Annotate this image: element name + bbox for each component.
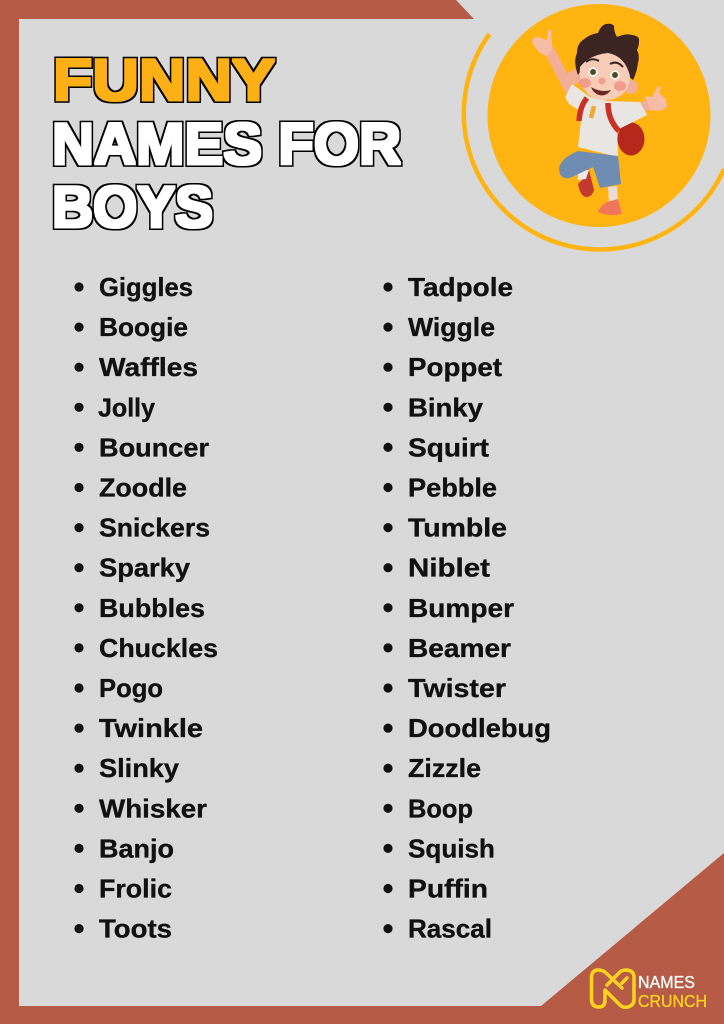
name row: Squirt: [408, 432, 489, 462]
icon: N monogram: [592, 970, 634, 1007]
name row: Squish: [408, 833, 495, 863]
name row: Toots: [99, 914, 172, 944]
name row: Pogo: [99, 673, 163, 703]
pointing hand: [645, 86, 667, 111]
cheeks: [579, 78, 591, 88]
left ear: [567, 70, 581, 84]
name row: Poppet: [408, 352, 502, 382]
name row: Bumper: [408, 593, 514, 623]
icon: cartoon boy with backpack: [532, 24, 667, 215]
name row: Niblet: [408, 553, 490, 583]
name row: Wiggle: [408, 312, 495, 342]
yellow circle behind character: [488, 4, 710, 227]
name row: Frolic: [99, 874, 172, 904]
name row: Chuckles: [99, 633, 218, 663]
name row: Puffin: [408, 874, 488, 904]
logo text: NAMES: NAMES: [638, 972, 695, 992]
extended arm: [634, 103, 652, 111]
name row: [74, 392, 156, 422]
title: [52, 48, 401, 240]
name row: Zoodle: [99, 472, 187, 502]
name row: Tumble: [408, 513, 507, 543]
name row: Bouncer: [99, 432, 209, 462]
name row: Doodlebug: [408, 713, 551, 743]
hair: [575, 24, 639, 80]
name row: Snickers: [99, 513, 210, 543]
name row: Waffles: [99, 352, 198, 382]
name row: Banjo: [99, 833, 174, 863]
sock: [578, 168, 589, 180]
backpack straps: [579, 98, 619, 131]
name row: Twister: [408, 673, 506, 703]
shirt: [565, 84, 647, 157]
title line: BOYS: BOYS: [52, 175, 213, 240]
name row: [383, 553, 490, 583]
face: [580, 53, 630, 100]
names list: left column: [74, 272, 218, 944]
name row: Binky: [408, 392, 484, 422]
name row: Boop: [408, 793, 473, 823]
names list: right column: [383, 272, 551, 944]
name row: Rascal: [408, 914, 492, 944]
name row: Jolly: [98, 392, 156, 422]
name row: Zizzle: [408, 753, 481, 783]
eyebrows: [586, 59, 623, 67]
logo text: CRUNCH: CRUNCH: [638, 991, 707, 1011]
shorts: [559, 151, 621, 188]
mouth: [591, 87, 611, 95]
name row: Slinky: [99, 753, 180, 783]
standing foot shoe: [598, 199, 622, 215]
raised hand: [532, 30, 552, 56]
standing leg sock: [608, 186, 618, 203]
name row: Bubbles: [99, 593, 205, 623]
name row: Pebble: [408, 472, 497, 502]
yellow ring arc: [464, 34, 724, 250]
nose: [598, 78, 606, 84]
name row: Giggles: [99, 272, 193, 302]
eyes: [588, 68, 598, 76]
name row: Sparky: [99, 553, 191, 583]
raised arm: [549, 50, 569, 88]
name row: Boogie: [99, 312, 188, 342]
raised foot shoe: [578, 166, 594, 197]
right ear: [624, 80, 638, 94]
name row: Whisker: [99, 793, 207, 823]
name row: Beamer: [408, 633, 511, 663]
title line: FUNNY: FUNNY: [53, 48, 275, 113]
backpack: [618, 122, 644, 156]
shirt placket: [591, 106, 594, 118]
logo: Names Crunch: [592, 970, 707, 1011]
title line: NAMES FOR: NAMES FOR: [52, 112, 401, 177]
name row: Tadpole: [408, 272, 513, 302]
name row: Twinkle: [99, 713, 203, 743]
